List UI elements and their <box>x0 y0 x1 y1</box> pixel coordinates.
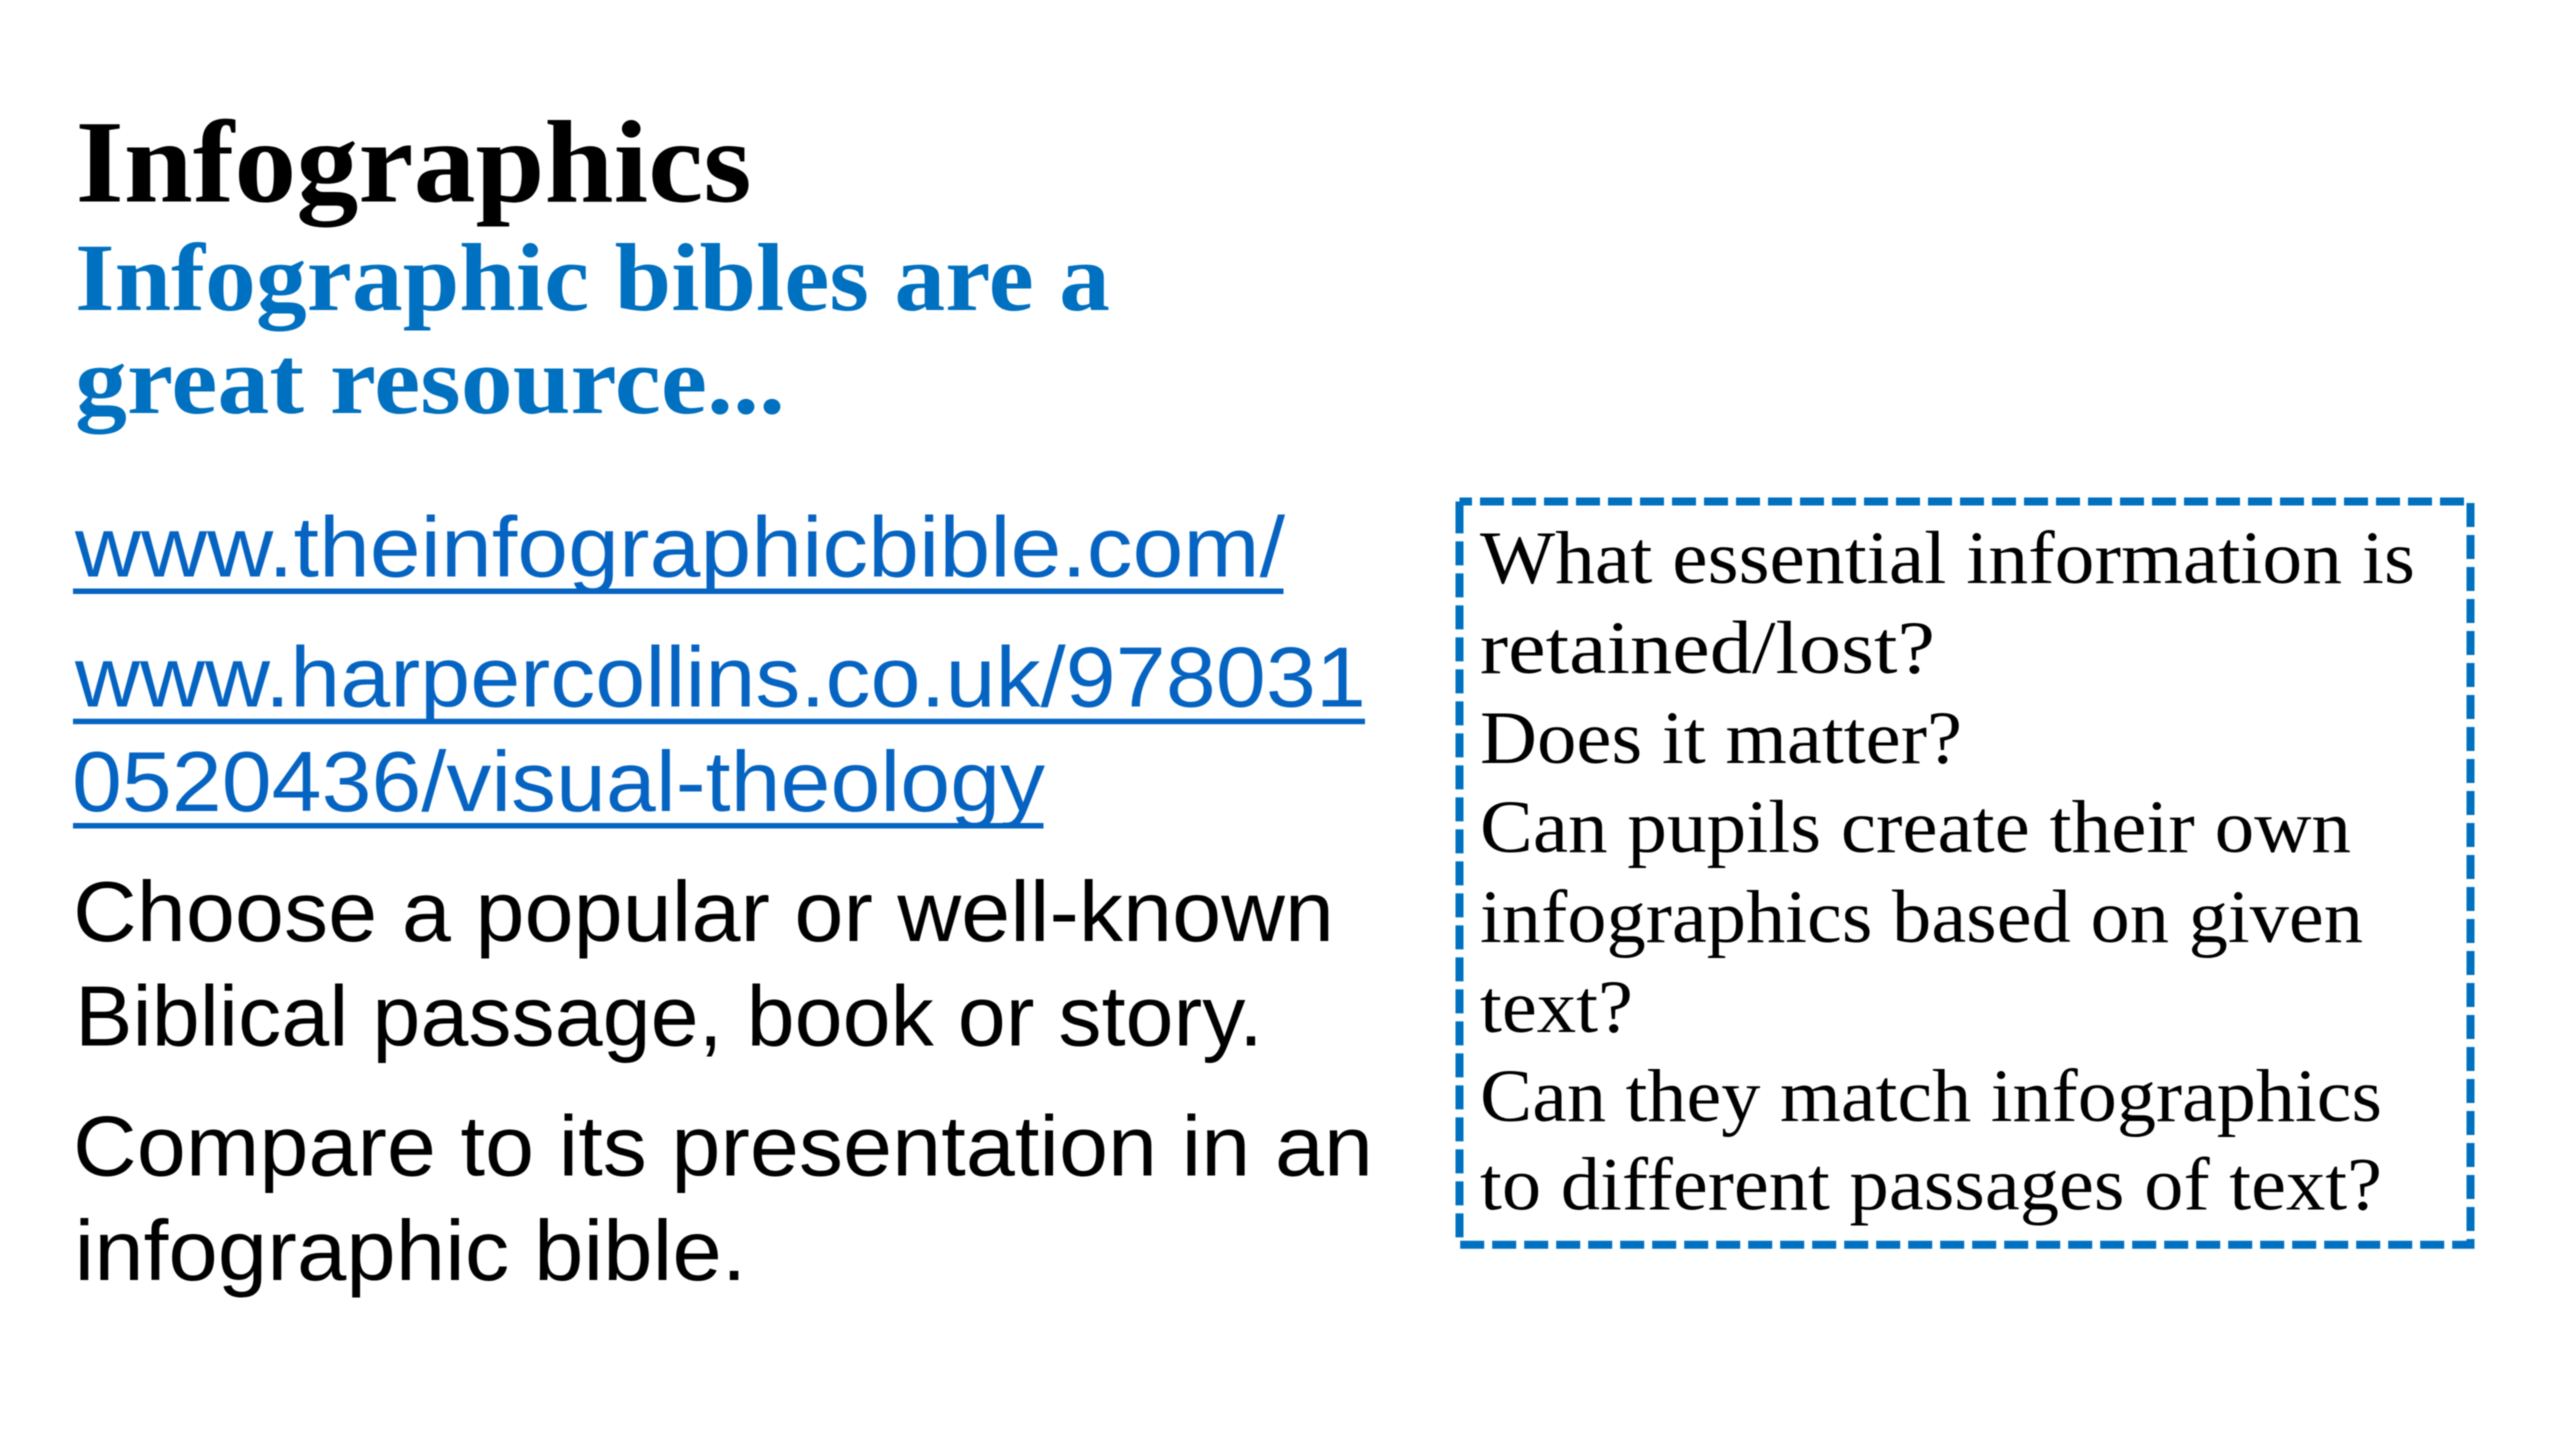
question text: What essential information is <box>1480 517 2415 600</box>
link: harpercollins visual theology: www.harpercollins.co.uk/978031 <box>74 631 1366 726</box>
question text: Can pupils create their own <box>1480 786 2351 869</box>
question text: infographics based on given <box>1480 876 2363 959</box>
question text: retained/lost? <box>1480 607 1935 690</box>
link: harpercollins visual theology <box>72 631 1366 830</box>
link: the infographic bible: www.theinfographicbible.com/ <box>74 501 1285 596</box>
instruction: compare to infographic bible: Compare to its presentation in an <box>73 1100 1373 1194</box>
question text <box>1480 517 2415 1226</box>
subtitle: Infographic bibles are a <box>75 224 1110 331</box>
link: harpercollins visual theology: 0520436/visual-theology <box>72 735 1046 830</box>
subtitle: great resource... <box>75 327 785 434</box>
title: Infographics <box>76 96 752 228</box>
instruction: choose a passage: Choose a popular or well-known <box>73 865 1334 960</box>
question text: to different passages of text? <box>1480 1144 2382 1226</box>
panel: discussion questions <box>1460 502 2470 1245</box>
question text: Does it matter? <box>1480 697 1962 780</box>
subtitle <box>75 224 1110 434</box>
instruction: compare to infographic bible: infographic bible. <box>74 1204 746 1299</box>
question text: Can they match infographics <box>1480 1055 2382 1138</box>
instruction: choose a passage: Biblical passage, book or story. <box>75 970 1263 1064</box>
instruction: choose a passage <box>73 865 1334 1064</box>
instruction: compare to infographic bible <box>73 1100 1373 1299</box>
question text: text? <box>1480 966 1633 1049</box>
